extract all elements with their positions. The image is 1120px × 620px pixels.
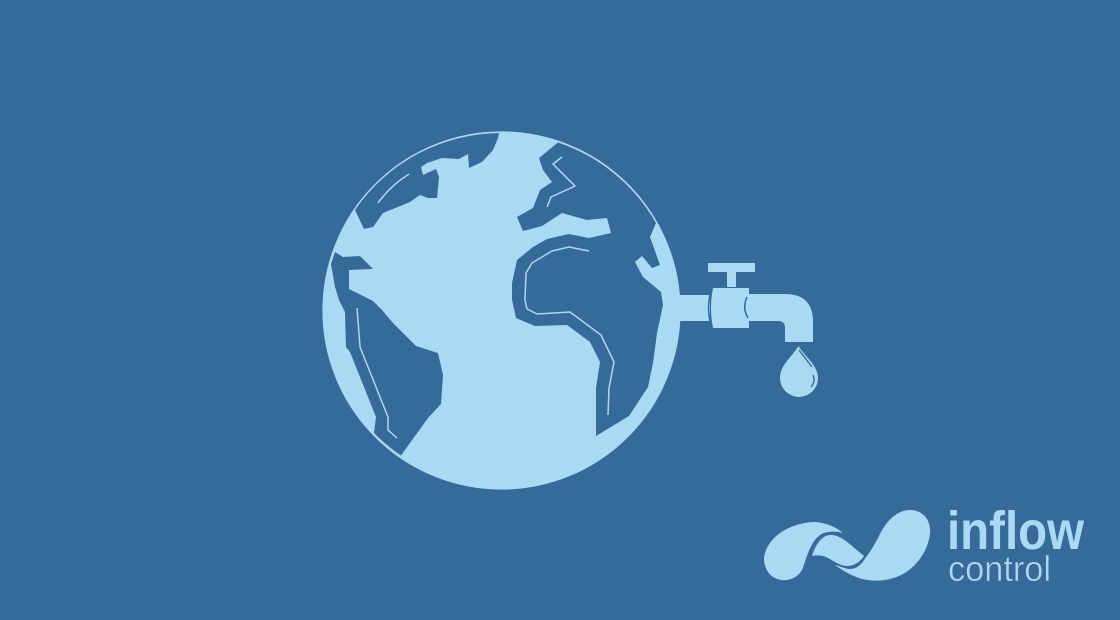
logo: [764, 501, 1085, 589]
logo right lobe: [835, 510, 930, 581]
faucet: [670, 263, 813, 342]
coastline detail lines: [357, 157, 614, 438]
faucet pipe from globe: [670, 295, 710, 321]
logo left lobe: [764, 522, 843, 580]
logo wordmark: inflow: inflow: [947, 501, 1085, 561]
logo mark: [764, 510, 930, 581]
logo wordmark: control: control: [948, 548, 1051, 589]
globe: [323, 132, 680, 489]
ocean: atlantic: [512, 142, 663, 436]
ocean: north west: [355, 133, 499, 229]
collar seam: [745, 297, 748, 318]
faucet handle: [708, 263, 755, 287]
logo middle band: [812, 535, 864, 566]
faucet collar: [711, 288, 749, 328]
globe outline: [323, 132, 680, 489]
faucet spout: [748, 294, 813, 342]
collar left seam: [708, 295, 710, 321]
water drop: [780, 346, 818, 397]
ocean: south west: [331, 252, 443, 456]
